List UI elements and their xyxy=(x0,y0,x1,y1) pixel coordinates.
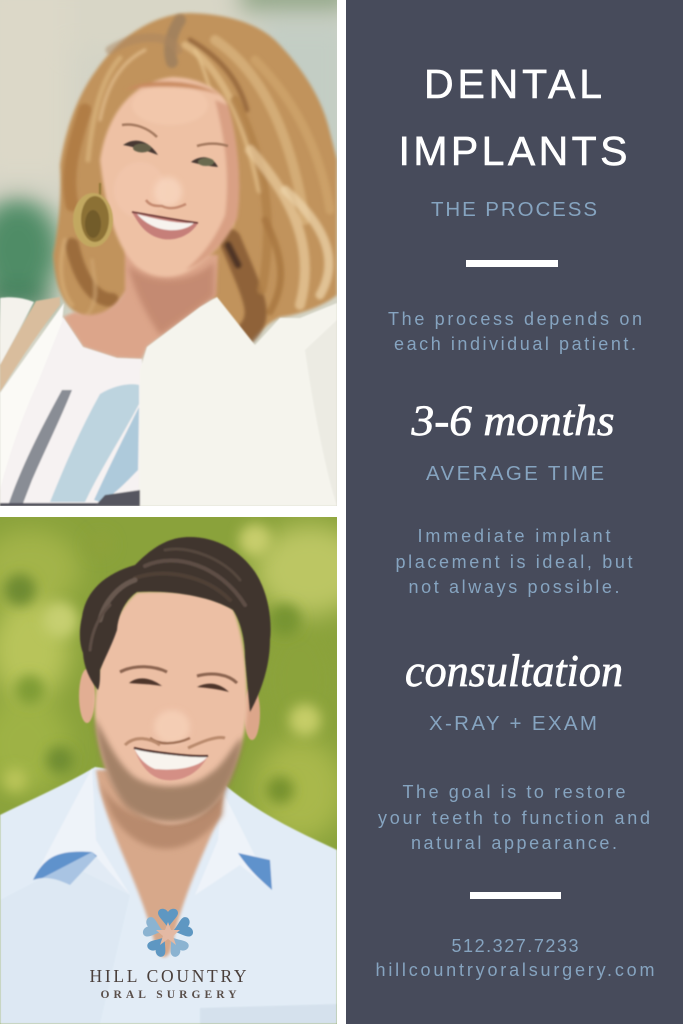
text: the goal: your teeth to function and xyxy=(378,808,650,828)
text: immediate placement: Immediate implant xyxy=(418,526,610,546)
logo wordmark: HILL COUNTRY xyxy=(90,966,247,986)
label: average time: AVERAGE TIME xyxy=(426,462,604,485)
woman's clothing xyxy=(0,297,337,506)
logo: Hill Country Oral Surgery xyxy=(90,909,247,1001)
contact details: 512.327.7233 xyxy=(452,936,578,956)
panel: process details xyxy=(346,0,683,1024)
woman's face xyxy=(100,77,239,277)
text: the goal: The goal is to restore xyxy=(402,782,626,802)
divider bar top xyxy=(466,260,558,267)
woman's hair mass xyxy=(53,13,337,345)
title: IMPLANTS xyxy=(398,128,628,174)
text: the goal: natural appearance. xyxy=(411,833,617,853)
photo: smiling woman xyxy=(0,0,350,506)
man's facial features xyxy=(120,667,237,780)
icon: flower logo xyxy=(142,909,194,959)
woman's facial features xyxy=(122,125,228,239)
divider bar bottom xyxy=(470,892,561,899)
label: x-ray and exam: X-RAY + EXAM xyxy=(429,712,597,735)
photo: smiling man xyxy=(0,517,365,1024)
man's neck xyxy=(96,770,225,957)
text: immediate placement: not always possible. xyxy=(408,577,620,597)
man's ears xyxy=(79,669,260,740)
title: DENTAL xyxy=(424,61,602,107)
man's face xyxy=(95,591,247,824)
icon: gold earring xyxy=(73,183,113,247)
intro text: The process depends on xyxy=(388,309,642,329)
woman's neck and chest xyxy=(63,250,218,359)
contact details: hillcountryoralsurgery.com xyxy=(376,960,654,980)
subtitle: THE PROCESS xyxy=(431,198,597,221)
callout: 3-6 months: 3-6 months xyxy=(410,398,614,445)
contact details xyxy=(376,936,654,980)
intro text xyxy=(388,309,642,354)
hair shading and strands xyxy=(61,20,330,335)
man's shirt xyxy=(0,767,337,1024)
text: immediate placement: placement is ideal, but xyxy=(396,552,632,572)
callout: consultation: consultation xyxy=(405,646,623,696)
logo tagline: ORAL SURGERY xyxy=(100,989,237,1001)
intro text: each individual patient. xyxy=(394,334,636,354)
man's hair xyxy=(80,537,271,712)
text: the goal xyxy=(378,782,650,853)
title xyxy=(398,61,628,174)
man's stubble xyxy=(94,717,243,822)
text: immediate placement xyxy=(396,526,632,597)
